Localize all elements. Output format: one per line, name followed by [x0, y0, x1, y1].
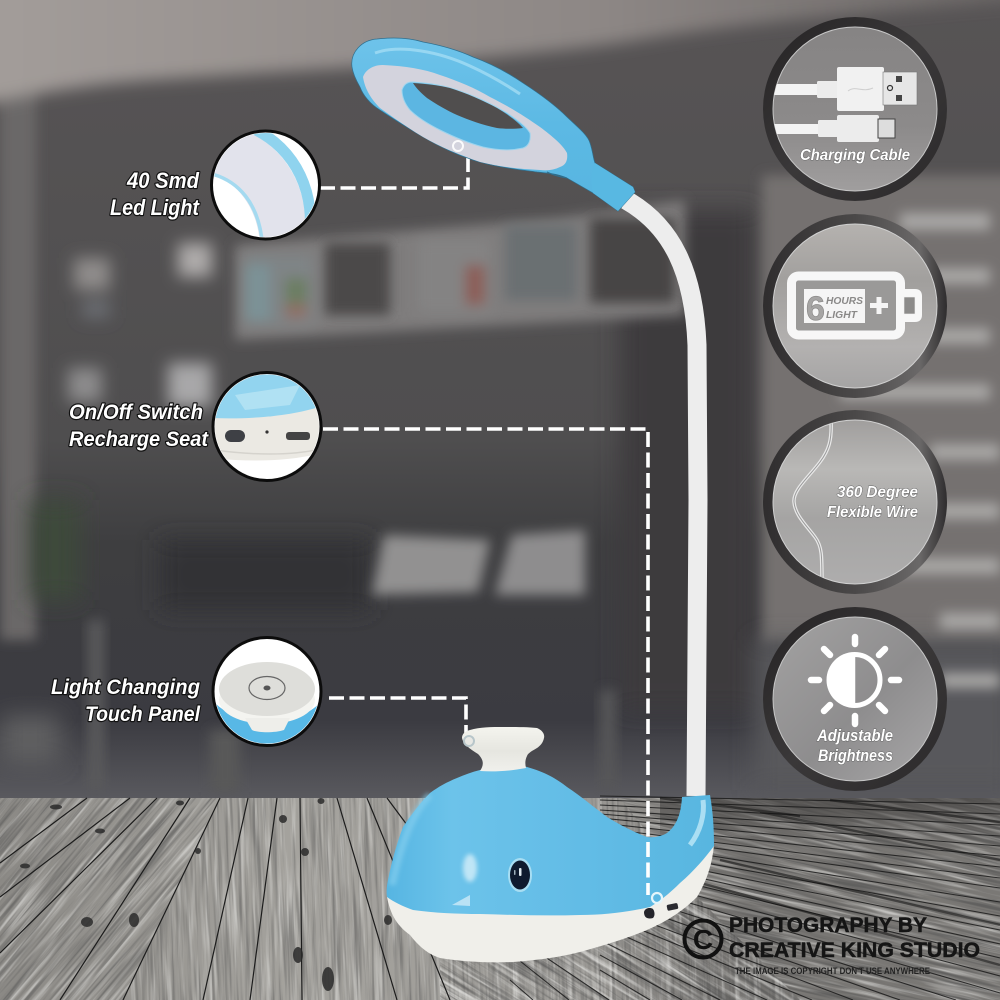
feature badge: adjustable brightness [763, 607, 947, 791]
credit line two: CREATIVE KING STUDIO [729, 939, 980, 962]
text: HOURS: HOURS [826, 295, 863, 307]
battery icon [792, 276, 922, 335]
dashed leader: LED light [320, 155, 468, 188]
micro USB detail [286, 432, 310, 440]
label: Light Changing Touch Panel: Touch Panel [85, 702, 201, 726]
label: 40 Smd Led Light [110, 168, 200, 220]
dashed leader: switch and recharge seat [323, 429, 648, 895]
copyright watermark [684, 914, 980, 976]
whale lamp base [387, 727, 714, 962]
pointer marker: touch panel [464, 736, 474, 746]
text: Adjustable Brightness: Adjustable [816, 727, 893, 745]
text: 6: 6 [806, 290, 825, 328]
wooden plank floor [0, 796, 1000, 1000]
label: 40 Smd Led Light: 40 Smd [126, 168, 200, 193]
lamp head [352, 38, 635, 211]
USB cable icon [770, 67, 917, 142]
micro USB port [666, 903, 678, 911]
label: Light Changing Touch Panel: Light Changing [51, 675, 200, 699]
text: Adjustable Brightness: Brightness [818, 747, 893, 765]
label: 40 Smd Led Light: Led Light [110, 195, 200, 220]
whale white underbelly [387, 845, 714, 962]
lamp gooseneck [626, 200, 698, 796]
feature badge: charging cable [763, 17, 947, 201]
power switch port [644, 908, 654, 918]
feature badge: battery hours [763, 214, 947, 398]
whale eye [508, 858, 532, 892]
wire icon [794, 420, 831, 585]
callout circle: switch and recharge seat [212, 371, 322, 482]
label: On/Off Switch Recharge Seat [69, 401, 209, 451]
touch ring [249, 676, 285, 700]
pointer marker: switch [652, 893, 662, 903]
feature badge: flexible wire [763, 410, 947, 594]
blurred room background [0, 0, 1000, 800]
switch detail [225, 430, 245, 442]
text: 360 Degree Flexible Wire: 360 Degree [837, 484, 918, 501]
text: LIGHT: LIGHT [826, 309, 859, 321]
whale blue body [387, 766, 714, 915]
label: Light Changing Touch Panel [51, 675, 201, 726]
copyright notice: THE IMAGE IS COPYRIGHT DON'T USE ANYWHERE [735, 966, 930, 976]
callout circle: touch panel [210, 638, 325, 750]
copyright symbol [684, 920, 722, 958]
pointer marker: LED [453, 141, 463, 151]
label: On/Off Switch Recharge Seat: Recharge Seat [69, 428, 209, 451]
ring opening [413, 83, 523, 129]
touch dot [264, 686, 270, 690]
sun half icon [811, 637, 899, 724]
text: 360 Degree Flexible Wire [827, 484, 918, 521]
text: 360 Degree Flexible Wire: Flexible Wire [827, 504, 918, 521]
credit line one: PHOTOGRAPHY BY [729, 914, 927, 937]
whale touch finial [462, 727, 544, 771]
pinhole detail [265, 430, 269, 434]
text: Charging Cable: Charging Cable [800, 147, 910, 164]
blue inner rim [402, 82, 530, 150]
dashed leader: touch panel [329, 698, 466, 733]
callout circle: LED light [205, 128, 320, 245]
label: On/Off Switch Recharge Seat: On/Off Switch [69, 401, 203, 424]
LED light ring [363, 65, 567, 170]
plus sign [870, 297, 888, 314]
text: Adjustable Brightness [816, 727, 893, 765]
copyright symbol: C [693, 924, 713, 955]
